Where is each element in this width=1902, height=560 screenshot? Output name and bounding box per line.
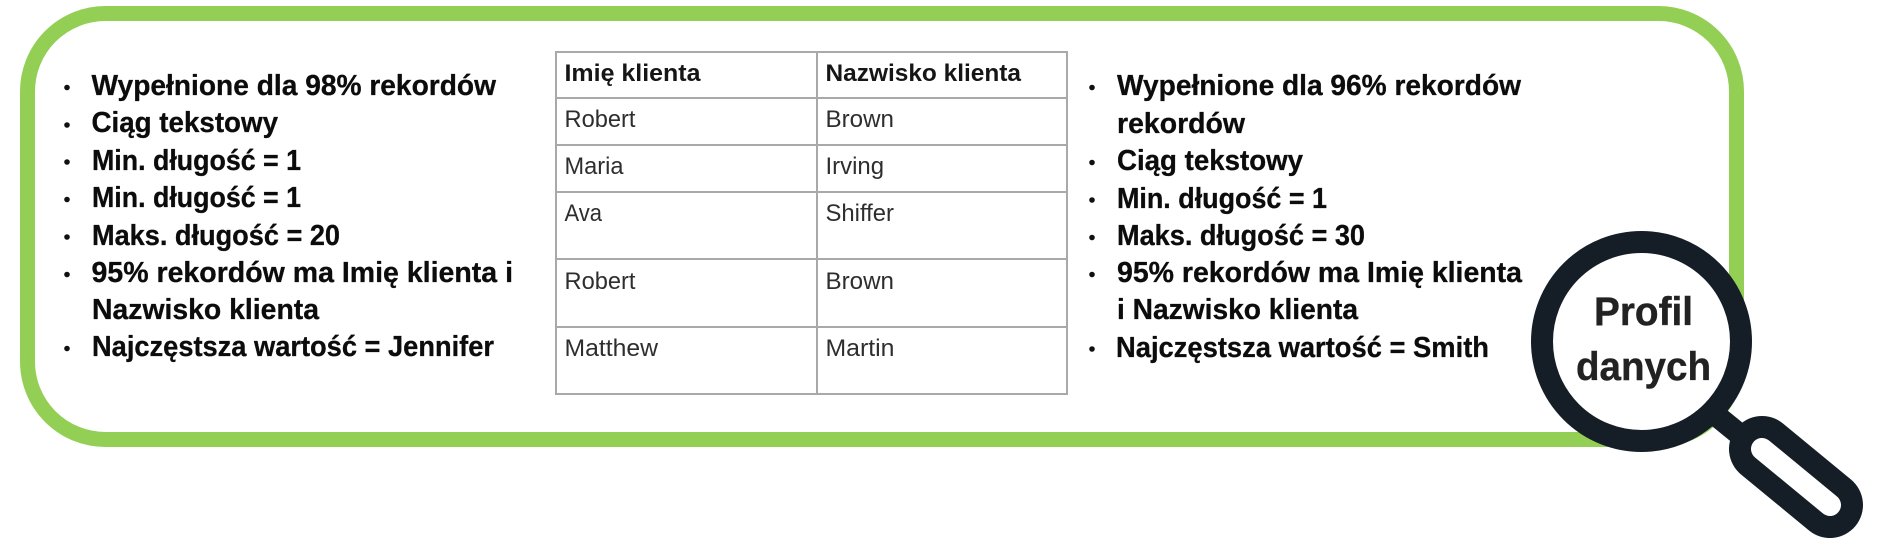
text block: last name profile: i Nazwisko klienta: [1117, 294, 1359, 326]
table: customer names: Robert: [564, 106, 636, 133]
table: customer names: Martin: [826, 335, 894, 362]
table: customer names: Imię klienta: [564, 60, 701, 87]
text block: last name profile: Wypełnione dla 96% rekordów: [1117, 70, 1521, 102]
heading: data profile label: Profil: [1594, 290, 1693, 334]
heading: data profile label: [1576, 290, 1711, 389]
text block: last name profile: rekordów: [1117, 108, 1245, 140]
table: customer names: Nazwisko klienta: [826, 60, 1022, 87]
table: customer names: Robert: [564, 268, 636, 295]
text block: first name profile: Ciąg tekstowy: [92, 107, 278, 139]
text block: first name profile: Min. długość = 1: [92, 145, 301, 177]
table: customer names: Shiffer: [826, 200, 894, 227]
text block: first name profile: Wypełnione dla 98% rekordów: [92, 70, 496, 102]
table: customer names: [556, 52, 1067, 394]
table: customer names: Irving: [826, 153, 884, 180]
table: customer names: Maria: [564, 153, 624, 180]
text block: first name profile: [64, 70, 513, 363]
text block: first name profile: 95% rekordów ma Imię klienta i: [92, 257, 513, 289]
table: customer names: Brown: [826, 268, 894, 295]
text block: first name profile: Nazwisko klienta: [92, 294, 320, 326]
text block: last name profile: [1089, 70, 1523, 364]
text block: first name profile: Min. długość = 1: [92, 182, 301, 214]
table: customer names: Brown: [826, 106, 894, 133]
panel: green rounded frame: [28, 14, 1736, 440]
text block: first name profile: Maks. długość = 20: [92, 220, 340, 252]
text block: last name profile: Najczęstsza wartość = Smith: [1116, 332, 1489, 364]
text block: last name profile: Maks. długość = 30: [1117, 220, 1365, 252]
heading: data profile label: danych: [1576, 345, 1711, 389]
icon: magnifying glass: [1542, 242, 1830, 505]
table: customer names: Matthew: [564, 335, 659, 362]
text block: last name profile: 95% rekordów ma Imię klienta: [1117, 257, 1523, 289]
text block: last name profile: Ciąg tekstowy: [1117, 145, 1303, 177]
text block: last name profile: Min. długość = 1: [1117, 183, 1327, 215]
text block: first name profile: Najczęstsza wartość = Jennifer: [92, 331, 494, 363]
table: customer names: Ava: [564, 200, 603, 227]
